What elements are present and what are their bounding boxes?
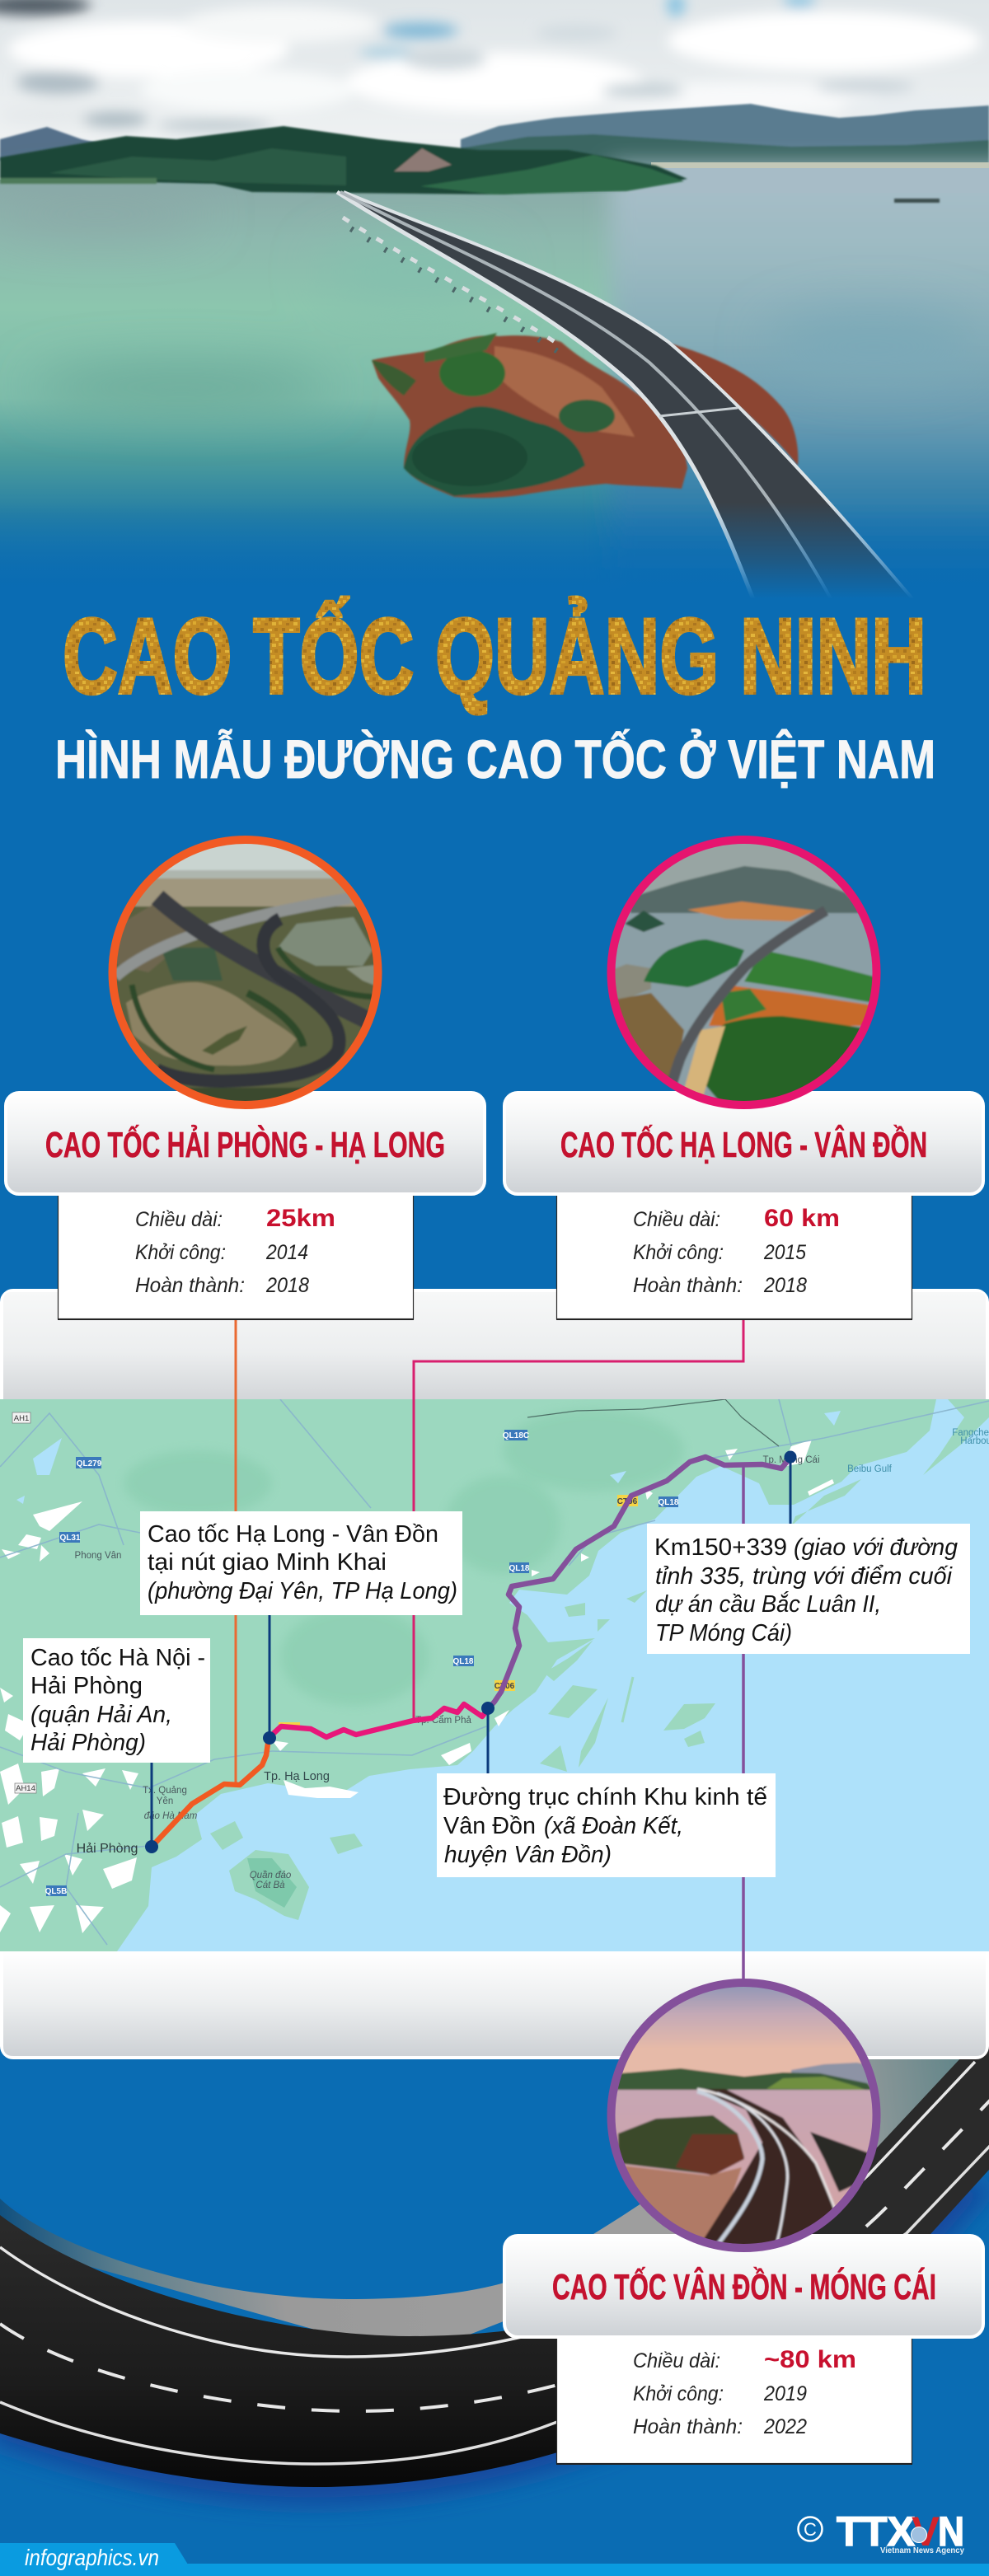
- map labels: [12, 1412, 989, 1896]
- map labels: QL31: [59, 1534, 81, 1543]
- info box: Hạ Long - Vân Đồn: 2015: [763, 1241, 806, 1264]
- callout: Cao tốc Hà Nội - Hải Phòng: [23, 1638, 210, 1763]
- info box: Hạ Long - Vân Đồn: Khởi công:: [633, 1241, 724, 1264]
- map labels: Beibu Gulf: [847, 1464, 893, 1474]
- callout: Cao tốc Hạ Long - Vân Đồn: tại nút giao Minh Khai: [148, 1549, 387, 1576]
- info box: Vân Đồn - Móng Cái: Chiều dài:: [633, 2349, 720, 2372]
- card: Cao tốc Hạ Long - Vân Đồn: [504, 1093, 983, 1194]
- info box: Hải Phòng - Hạ Long: 25km: [266, 1205, 335, 1232]
- map labels: QL5B: [45, 1887, 67, 1896]
- callout: Cao tốc Hạ Long - Vân Đồn: Cao tốc Hạ Long - Vân Đồn: [148, 1521, 438, 1548]
- map labels: QL18: [509, 1564, 530, 1573]
- callout: Km150+339: Km150+339: [654, 1534, 787, 1561]
- photo circle: Hạ Long - Vân Đồn road: [607, 836, 880, 1109]
- copyright symbol: C: [804, 2519, 817, 2540]
- map labels: Hải Phòng: [77, 1842, 138, 1856]
- info box: Hải Phòng - Hạ Long: Chiều dài:: [135, 1208, 223, 1231]
- logo: TTXVN: TTX: [837, 2508, 915, 2555]
- connector: pink line to Hạ Long - Vân Đồn: [414, 1319, 743, 1721]
- info box: Hạ Long - Vân Đồn: [556, 1187, 912, 1319]
- map labels: QL279: [77, 1459, 102, 1468]
- card: Cao tốc Hải Phòng - Hạ Long: CAO TỐC HẢI PHÒNG - HẠ LONG: [45, 1123, 445, 1165]
- callout: Đường trục chính Khu kinh tế Vân Đồn: huyện Vân Đồn): [444, 1842, 612, 1868]
- info box: Hải Phòng - Hạ Long: 2018: [265, 1274, 309, 1297]
- info box: Hải Phòng - Hạ Long: Khởi công:: [135, 1241, 226, 1264]
- map of Quảng Ninh expressway: [0, 1399, 989, 1951]
- callout: Đường trục chính Khu kinh tế Vân Đồn: Đường trục chính Khu kinh tế: [443, 1784, 767, 1810]
- logo: TTXVN: V: [912, 2508, 940, 2555]
- logo: TTXVN: [837, 2508, 964, 2555]
- map labels: Tp. Móng Cái: [762, 1455, 820, 1465]
- map labels: QL18: [658, 1498, 679, 1507]
- info box: Vân Đồn - Móng Cái: Khởi công:: [633, 2382, 724, 2405]
- info box: Hạ Long - Vân Đồn: 60 km: [764, 1205, 840, 1232]
- panel: white map backing: [2, 1290, 987, 2058]
- island with red earth: [372, 333, 798, 498]
- bridge: [337, 192, 915, 602]
- darker mountain tones: [124, 1409, 684, 1706]
- map labels: Tp. Hạ Long: [264, 1770, 330, 1783]
- lakes and white urban patches: [0, 1440, 834, 1933]
- connector: purple line to Vân Đồn - Móng Cái: [742, 1465, 745, 1982]
- info box: Hải Phòng - Hạ Long: Hoàn thành:: [135, 1274, 245, 1297]
- callout: Đường trục chính Khu kinh tế Vân Đồn: [437, 1773, 776, 1877]
- info box: Hạ Long - Vân Đồn: Hoàn thành:: [633, 1274, 743, 1297]
- callout: Cao tốc Hà Nội - Hải Phòng: Hải Phòng): [30, 1730, 146, 1756]
- road illustration at bottom: [0, 2019, 989, 2505]
- connector: orange line to Hải Phòng - Hạ Long: [234, 1319, 237, 1785]
- callout: Đường trục chính Khu kinh tế Vân Đồn: Vân Đồn: [443, 1813, 536, 1839]
- logo: TTXVN: Vietnam News Agency: [880, 2546, 964, 2555]
- logo: TTXVN: N: [938, 2508, 964, 2555]
- map labels: AH1: [14, 1414, 29, 1423]
- callout: Km150+339: dự án cầu Bắc Luân II,: [655, 1590, 881, 1618]
- map labels: CT06: [617, 1497, 638, 1506]
- info box: Hạ Long - Vân Đồn: 2018: [763, 1274, 807, 1297]
- land masses: [0, 1399, 989, 1951]
- route: pink section: [269, 1704, 488, 1738]
- road network: [0, 1399, 989, 1945]
- photo circle: Vân Đồn - Móng Cái bridge: [607, 1979, 880, 2252]
- map labels: QL18C: [503, 1431, 529, 1440]
- info box: Hải Phòng - Hạ Long: 2014: [265, 1241, 308, 1264]
- info box: Vân Đồn - Móng Cái: [556, 2332, 912, 2464]
- callout: Km150+339: TP Móng Cái): [655, 1620, 792, 1646]
- footer strip: [0, 2543, 989, 2576]
- info box: Vân Đồn - Móng Cái: Hoàn thành:: [633, 2415, 743, 2438]
- map labels: Tp. Cẩm Phả: [415, 1716, 471, 1726]
- callout: Cao tốc Hà Nội - Hải Phòng: Hải Phòng: [30, 1673, 143, 1699]
- info box: Vân Đồn - Móng Cái: 2022: [763, 2415, 807, 2438]
- map labels: QL18: [452, 1657, 474, 1666]
- website label: infographics.vn: [25, 2545, 159, 2570]
- route: orange section: [152, 1738, 269, 1847]
- map labels: AH14: [16, 1784, 35, 1793]
- map labels: Yên: [157, 1796, 173, 1806]
- card: Cao tốc Hải Phòng - Hạ Long: [6, 1093, 485, 1194]
- callout: Đường trục chính Khu kinh tế Vân Đồn: (xã Đoàn Kết,: [544, 1813, 683, 1839]
- marker stems: [152, 1457, 790, 1847]
- marker dots: [145, 1450, 796, 1853]
- info box: Vân Đồn - Móng Cái: ~80 km: [764, 2346, 856, 2373]
- hero photo: bridge over bay: [0, 0, 989, 610]
- map labels: Cát Bà: [255, 1880, 285, 1890]
- copyright symbol: [798, 2517, 823, 2541]
- callout: Cao tốc Hạ Long - Vân Đồn: (phường Đại Yên, TP Hạ Long): [148, 1578, 457, 1604]
- callout: Cao tốc Hà Nội - Hải Phòng: Cao tốc Hà Nội -: [30, 1645, 205, 1671]
- photo circle: interchange: [109, 836, 382, 1109]
- callout: Cao tốc Hạ Long - Vân Đồn: [140, 1511, 462, 1615]
- card: Cao tốc Vân Đồn - Móng Cái: [504, 2236, 983, 2337]
- callout: Km150+339: tỉnh 335, trùng với điểm cuối: [655, 1563, 954, 1590]
- map labels: Tx. Quảng: [143, 1786, 187, 1796]
- info box: Hạ Long - Vân Đồn: Chiều dài:: [633, 1208, 720, 1231]
- callout: Km150+339: (giao với đường: [794, 1534, 958, 1561]
- callout: Cao tốc Hà Nội - Hải Phòng: (quận Hải An,: [30, 1702, 172, 1728]
- info box: Vân Đồn - Móng Cái: 2019: [763, 2382, 807, 2405]
- map labels: Phong Vân: [75, 1551, 121, 1561]
- callout: Km150+339: [647, 1524, 970, 1654]
- route: purple section: [488, 1457, 790, 1709]
- map labels: Quần đảo: [250, 1871, 292, 1880]
- info box: Hải Phòng - Hạ Long: [58, 1187, 414, 1319]
- map labels: đảo Hà Nam: [144, 1811, 198, 1821]
- map labels: CT06: [494, 1682, 515, 1691]
